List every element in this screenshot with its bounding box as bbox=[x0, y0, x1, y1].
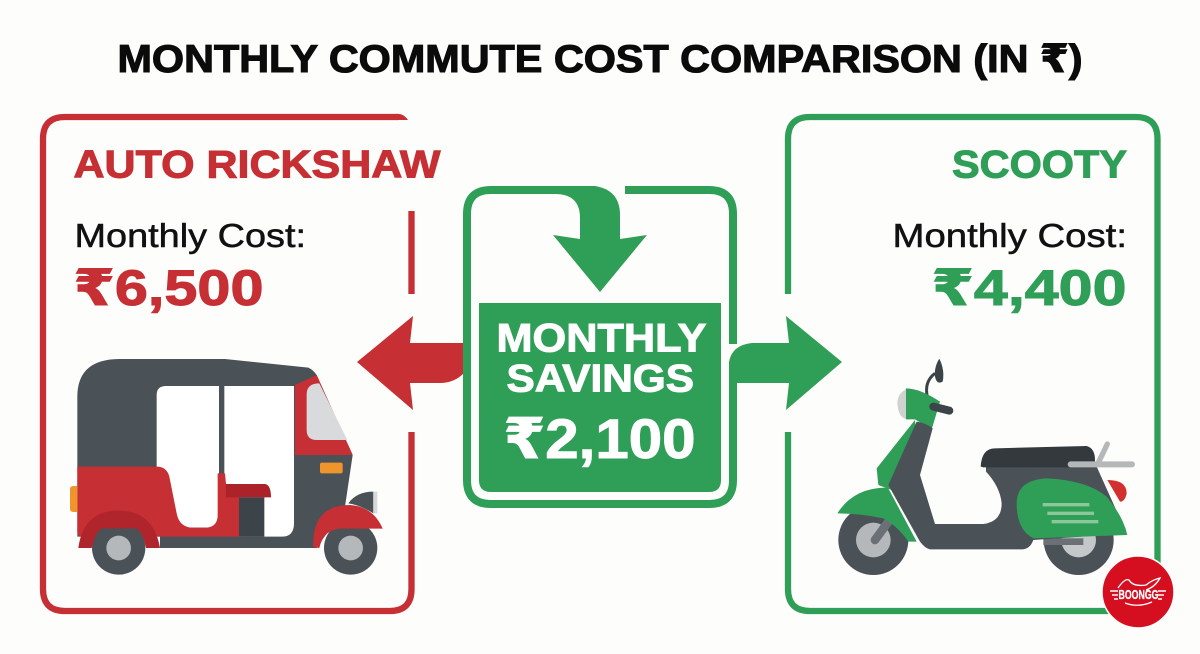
heading: auto rickshaw: AUTO RICKSHAW bbox=[74, 144, 441, 186]
panel corner stub: auto rickshaw bbox=[396, 114, 408, 120]
savings box bbox=[479, 303, 721, 492]
label: auto monthly cost: Monthly Cost: bbox=[74, 217, 306, 254]
savings panel outline bbox=[467, 190, 733, 504]
arrow: to auto rickshaw bbox=[357, 316, 465, 410]
arrow: down into savings bbox=[553, 186, 647, 292]
heading: scooty: SCOOTY bbox=[952, 144, 1127, 186]
icon: auto rickshaw bbox=[70, 359, 383, 575]
value: scooty cost: ₹4,400 bbox=[932, 260, 1126, 316]
label: scooty monthly cost: Monthly Cost: bbox=[892, 217, 1127, 254]
savings heading line 2: SAVINGS bbox=[506, 358, 694, 400]
value: auto cost: ₹6,500 bbox=[74, 260, 264, 316]
savings value: ₹2,100 bbox=[504, 407, 696, 470]
panel outline: auto rickshaw bbox=[43, 117, 412, 611]
icon: scooter bbox=[837, 359, 1132, 575]
logo badge bbox=[1102, 556, 1174, 628]
logo text: BOONGG bbox=[1118, 587, 1158, 602]
logo swoosh bbox=[1118, 578, 1160, 605]
arrow: to scooty bbox=[729, 316, 842, 410]
title: MONTHLY COMMUTE COST COMPARISON (IN ₹) bbox=[118, 38, 1082, 81]
logo wings bbox=[1110, 591, 1166, 599]
panel: auto rickshaw bbox=[43, 114, 441, 611]
panel: monthly savings bbox=[467, 186, 733, 504]
panel outline: scooty bbox=[788, 117, 1158, 611]
panel: scooty bbox=[788, 117, 1158, 611]
savings heading line 1: MONTHLY bbox=[496, 316, 707, 360]
